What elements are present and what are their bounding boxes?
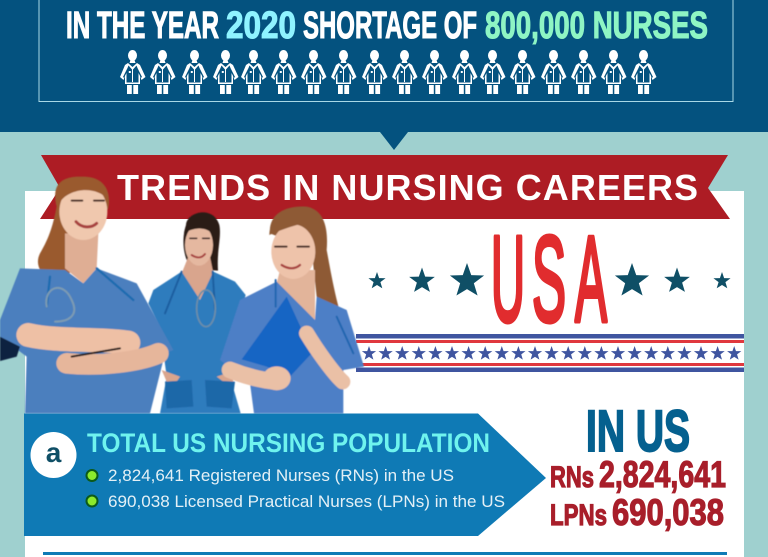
- headline: shortage of nurses: [66, 5, 708, 47]
- red ribbon banner: [40, 155, 730, 219]
- white content panel: [25, 191, 744, 557]
- headline: shortage of nurses: 2020: [226, 5, 296, 47]
- stat: in us: IN US: [586, 399, 690, 464]
- row of decorative stars: [368, 263, 731, 296]
- section a: arrow banner: [24, 414, 546, 536]
- headline: shortage of nurses: IN THE YEAR: [66, 5, 219, 47]
- nurse left: [0, 177, 173, 413]
- stat: LPN count: LPNs: [550, 499, 607, 532]
- stat: RN count: [550, 454, 726, 495]
- section divider: [43, 552, 727, 555]
- row of 18 nurse icons: [120, 50, 656, 94]
- illustration: three nurses: [0, 177, 364, 413]
- stat: RN count: RNs: [550, 461, 594, 494]
- header band: [0, 0, 768, 150]
- badge letter a: a: [46, 437, 62, 468]
- USA lettering: S: [532, 211, 566, 347]
- bullet: registered nurses: 2,824,641 Registered Nurses (RNs) in the US: [108, 467, 454, 485]
- section a heading: TOTAL US NURSING POPULATION: [87, 428, 490, 458]
- USA lettering: U: [491, 211, 525, 347]
- stat: RN count: 2,824,641: [599, 454, 726, 495]
- infographic canvas: A: [575, 211, 607, 347]
- bullet: licensed practical nurses: 690,038 Licensed Practical Nurses (LPNs) in the US: [108, 493, 505, 511]
- badge letter a: [30, 432, 76, 478]
- headline: shortage of nurses: SHORTAGE OF: [303, 5, 477, 47]
- nurse right: [220, 206, 364, 413]
- stat: LPN count: [550, 492, 724, 533]
- flag stripe with stars: [356, 334, 744, 372]
- stat: LPN count: 690,038: [612, 492, 724, 533]
- nurse centre: [148, 212, 246, 413]
- ribbon title: TRENDS IN NURSING CAREERS: [117, 167, 698, 208]
